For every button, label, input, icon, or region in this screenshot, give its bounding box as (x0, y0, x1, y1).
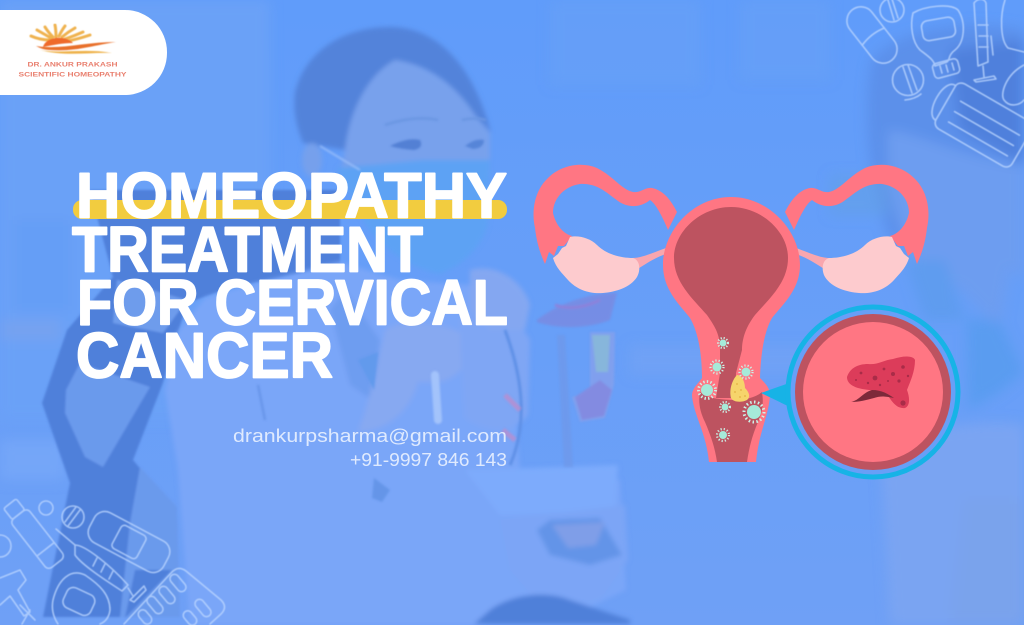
title (72, 160, 508, 392)
icons: medical line art, bottom left (0, 497, 224, 625)
right fallopian tube (785, 165, 928, 264)
contact details: +91-9997 846 143 (350, 450, 507, 470)
chair (42, 190, 340, 618)
left ovary (553, 236, 639, 293)
title: CANCER (76, 320, 333, 392)
abnormal growth (730, 375, 749, 402)
title highlight bar (73, 200, 507, 219)
right ligament (796, 248, 830, 270)
left fallopian tube (534, 165, 677, 264)
patient head and mask (867, 25, 1024, 250)
mask (337, 160, 490, 274)
virus cells (698, 338, 764, 441)
right ovary (823, 236, 909, 293)
coat folds, cuff and stethoscope (258, 385, 265, 420)
eyes and brows (390, 139, 421, 150)
cervical canal (699, 392, 763, 462)
title: TREATMENT (72, 214, 423, 286)
left ligament (632, 248, 666, 270)
logo badge (0, 10, 167, 95)
icon: rising sun logo (31, 25, 116, 54)
tumour (847, 356, 915, 408)
diagram: female reproductive system with cervical cancer (534, 165, 958, 477)
hand holding pen (358, 323, 469, 432)
uterine cavity (674, 207, 788, 398)
icons: medical line art, top right (841, 0, 1024, 170)
anatomical model (503, 293, 617, 467)
magnified cervix callout (788, 307, 958, 477)
hair (294, 27, 491, 150)
far sleeve and watch (500, 505, 628, 605)
logo text: DR. ANKUR PRAKASH (28, 62, 118, 68)
uterus wall (663, 197, 800, 462)
contact details: drankurpsharma@gmail.com (233, 426, 507, 446)
callout pointer (761, 382, 792, 408)
logo text: SCIENTIFIC HOMEOPATHY (18, 72, 127, 78)
title: FOR CERVICAL (77, 266, 508, 338)
contact details (233, 426, 507, 470)
logo text (18, 62, 127, 78)
title: HOMEOPATHY (76, 160, 507, 232)
face (340, 60, 490, 175)
coat (165, 262, 626, 625)
pen (435, 375, 438, 420)
